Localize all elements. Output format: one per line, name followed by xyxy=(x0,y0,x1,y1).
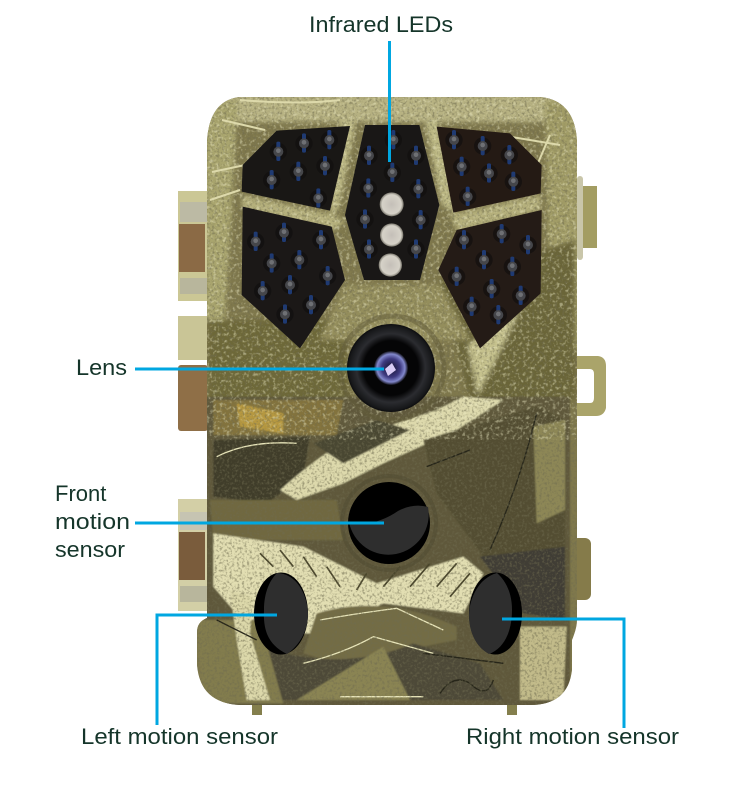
panel: upper right LEDs xyxy=(437,127,542,213)
left lower hinge xyxy=(178,499,210,611)
camera body xyxy=(190,90,585,730)
callout: right motion sensor: Right motion sensor xyxy=(466,724,679,749)
panel: center LEDs with white lights xyxy=(345,125,439,280)
camo branches xyxy=(217,443,443,697)
camo speckle texture xyxy=(190,90,585,710)
camo light flecks xyxy=(190,90,585,440)
side hardware xyxy=(178,176,606,715)
feet xyxy=(252,700,517,715)
right motion sensor xyxy=(469,572,522,654)
right lower knob xyxy=(570,530,591,612)
right loop xyxy=(573,356,606,416)
callout: right motion sensor xyxy=(466,619,679,749)
camera lens xyxy=(340,316,444,420)
callout: left motion sensor: Left motion sensor xyxy=(81,724,278,749)
left upper hinge xyxy=(178,191,210,301)
callout: front motion sensor: sensor xyxy=(55,537,125,562)
callout: infrared LEDs: Infrared LEDs xyxy=(309,12,453,37)
panel: lower left LEDs xyxy=(242,207,345,348)
lower camo layers in zoom coordinates xyxy=(197,397,570,730)
right upper knob xyxy=(575,176,597,260)
top rim camo xyxy=(205,95,580,420)
left motion sensor xyxy=(254,572,308,654)
callout: front motion sensor: Front xyxy=(55,481,106,506)
body base xyxy=(190,90,585,710)
infrared LED array xyxy=(242,125,542,348)
callout: left motion sensor xyxy=(81,615,278,749)
callout: lens: Lens xyxy=(76,355,127,380)
infographic: trail camera parts diagram xyxy=(56,16,679,748)
panel: lower right LEDs xyxy=(438,210,542,348)
callout: front motion sensor: motion xyxy=(55,509,130,534)
left latch xyxy=(178,316,210,431)
panel: upper left LEDs xyxy=(242,126,350,211)
callout: front motion sensor xyxy=(55,481,384,562)
front motion sensor xyxy=(342,476,436,570)
